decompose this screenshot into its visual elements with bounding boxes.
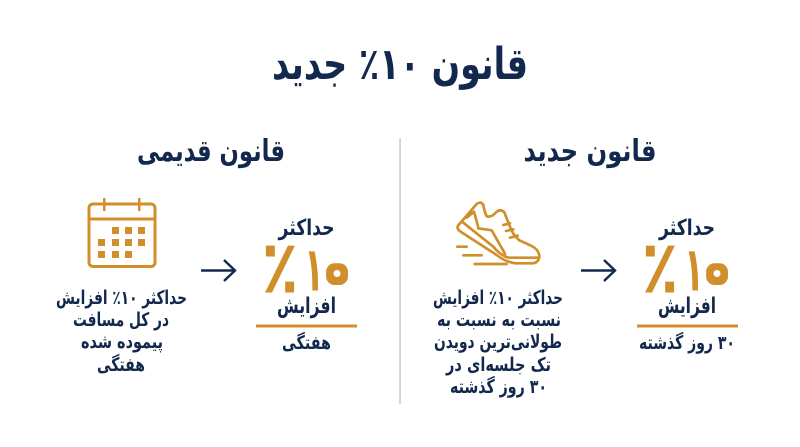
description: new rule: تک جلسه‌ای در — [445, 354, 551, 376]
panel: new rule — [433, 134, 738, 398]
stat: max 10% increase weekly: حداکثر — [278, 216, 334, 241]
title: قانون ۱۰٪ جدید — [272, 39, 528, 90]
big number: ٪ — [262, 225, 298, 309]
big number: ۰ — [708, 256, 726, 289]
stat: max 10% increase weekly — [256, 216, 357, 354]
description: old rule: حداکثر ۱۰٪ افزایش — [56, 287, 187, 309]
icon: calendar — [89, 198, 155, 266]
big number: ۱ — [305, 235, 323, 305]
arrow — [201, 260, 235, 281]
description: new rule — [433, 287, 563, 398]
big number — [262, 225, 346, 309]
stat: max 10% increase over last 30 days — [637, 216, 738, 354]
description: old rule: در کل مسافت — [73, 309, 169, 331]
description: new rule: طولانی‌ترین دویدن — [434, 331, 562, 353]
description: new rule: ۳۰ روز گذشته — [450, 375, 547, 398]
description: old rule: پیموده شده — [81, 331, 163, 353]
description: old rule: هفتگی — [97, 353, 145, 376]
big number: ۱ — [685, 235, 703, 305]
description: new rule: نسبت به نسبت به — [437, 309, 561, 331]
stat: max 10% increase over last 30 days: حداکثر — [658, 216, 715, 241]
stat: max 10% increase weekly: افزایش — [277, 294, 336, 319]
heading: old rule: قانون قدیمی — [137, 134, 285, 169]
heading: new rule: قانون جدید — [524, 134, 656, 169]
arrow — [581, 260, 615, 281]
big number — [642, 225, 726, 309]
big number: ٪ — [642, 225, 678, 309]
icon: running shoe — [457, 203, 539, 264]
description: old rule — [56, 287, 187, 376]
description: new rule: حداکثر ۱۰٪ افزایش — [433, 287, 563, 309]
stat: max 10% increase weekly: هفتگی — [282, 331, 331, 354]
stat: max 10% increase over last 30 days: ۳۰ روز گذشته — [639, 331, 735, 354]
stat: max 10% increase over last 30 days: افزایش — [658, 294, 716, 319]
panel: old rule — [56, 134, 357, 376]
big number: ۰ — [328, 256, 346, 289]
